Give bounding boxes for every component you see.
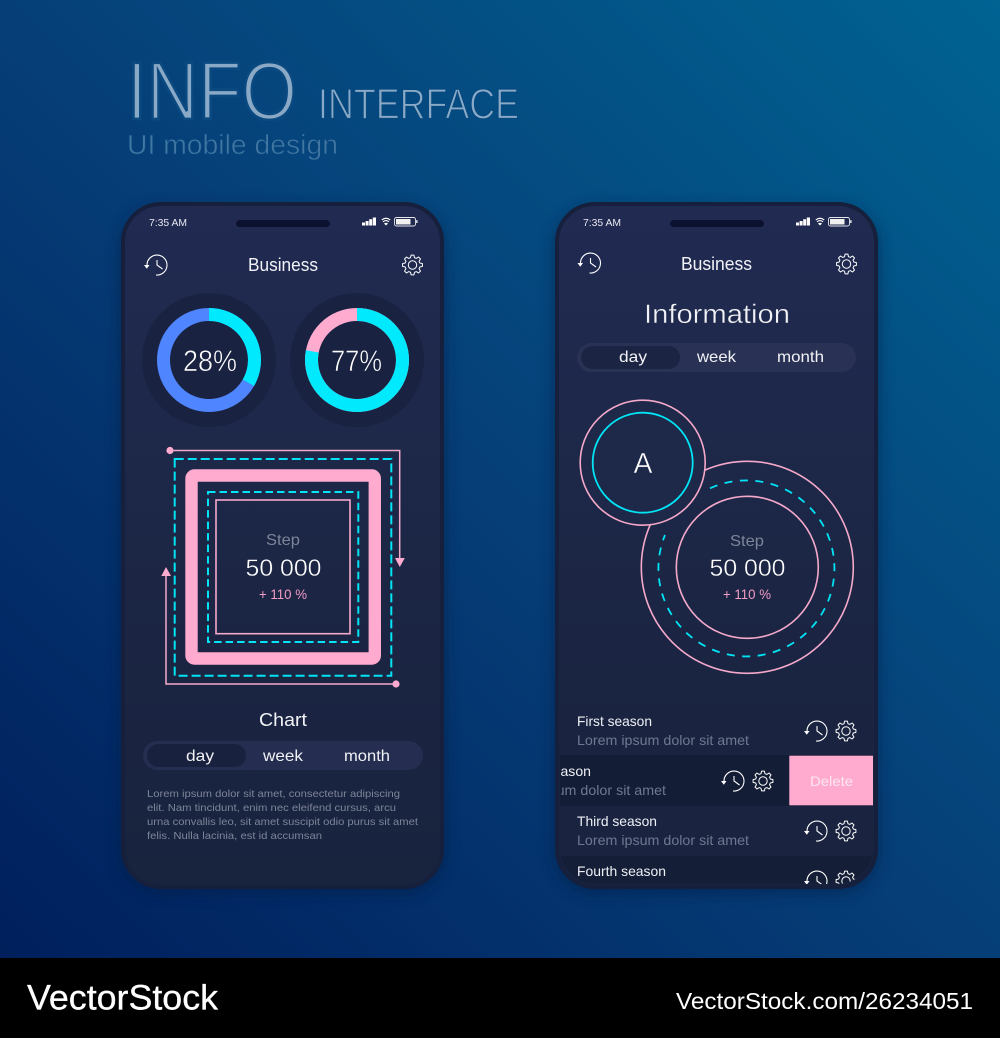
row: first season: First season [577,713,652,729]
row: third season: Lorem ipsum dolor sit amet [577,832,749,848]
heading: INFO: INFO [127,46,297,137]
donut chart 77%: 77% [331,345,382,378]
right phone [549,201,885,897]
season list [560,716,873,884]
paragraph: Lorem ipsum dolor sit amet, consectetur adipiscing [147,788,400,800]
tab switcher [577,343,856,372]
donut chart 28% [142,293,276,427]
brand: VectorStock [27,978,219,1018]
tab switcher: day [186,748,214,765]
tab switcher [143,741,423,770]
footer watermark band [0,958,1000,1038]
row: fourth season [564,856,872,884]
tab switcher: week [696,349,737,366]
heading: Information: Information [644,299,790,329]
header: Business: Business [681,254,752,274]
phone body [557,204,876,887]
header: Business: Business [248,255,318,275]
header: Business [144,255,422,275]
left phone [119,204,446,894]
step value: Step [730,533,764,550]
row: fourth season: Fourth season [577,863,666,879]
donut chart 77% [290,293,424,427]
square step chart [161,447,405,688]
row: second season swiped: Second season [494,763,591,779]
subheading: UI mobile design [127,129,338,160]
tab switcher: day [619,349,647,366]
step value: 50 000 [246,555,322,582]
status bar [149,217,418,229]
heading: Chart: Chart [259,709,307,730]
row: third season: Third season [577,813,657,829]
tab switcher: month [344,748,390,765]
phone shadow [553,206,880,894]
status bar: 7:35 AM [149,217,187,229]
paragraph [147,788,418,842]
donut chart 28%: 28% [183,345,237,378]
row: second season swiped [560,755,873,806]
circle A [580,400,705,525]
header: Business [578,253,856,274]
row: first season [578,716,856,748]
paragraph: felis. Nulla lacinia, est id accumsan [147,830,322,842]
step value [246,532,322,602]
image id: VectorStock.com/26234051 [676,988,973,1014]
phone shadow [119,206,446,894]
delete button: Delete [810,773,853,789]
status bar: 7:35 AM [583,217,621,229]
row: second season swiped: Lorem ipsum dolor sit amet [494,782,666,798]
arrow top [166,447,405,567]
tab switcher: week [262,748,304,765]
step value: Step [266,532,300,549]
title block [127,46,519,160]
paragraph: elit. Nam tincidunt, enim nec eleifend cursus, arcu [147,802,396,814]
tab switcher: month [777,349,824,366]
step value: 50 000 [710,555,786,582]
step value: + 110 % [723,586,771,602]
step value [710,533,786,602]
status bar [583,217,852,229]
circle A: A [634,448,653,480]
step value: + 110 % [259,586,307,602]
circle step chart [641,461,853,673]
row: third season [577,816,856,848]
delete button [789,756,873,805]
paragraph: urna convallis leo, sit amet suscipit odio purus sit amet [147,816,418,828]
phone body [123,204,442,887]
row: first season: Lorem ipsum dolor sit amet [577,732,749,748]
arrow bottom [161,567,400,688]
heading: INTERFACE: INTERFACE [318,80,519,128]
